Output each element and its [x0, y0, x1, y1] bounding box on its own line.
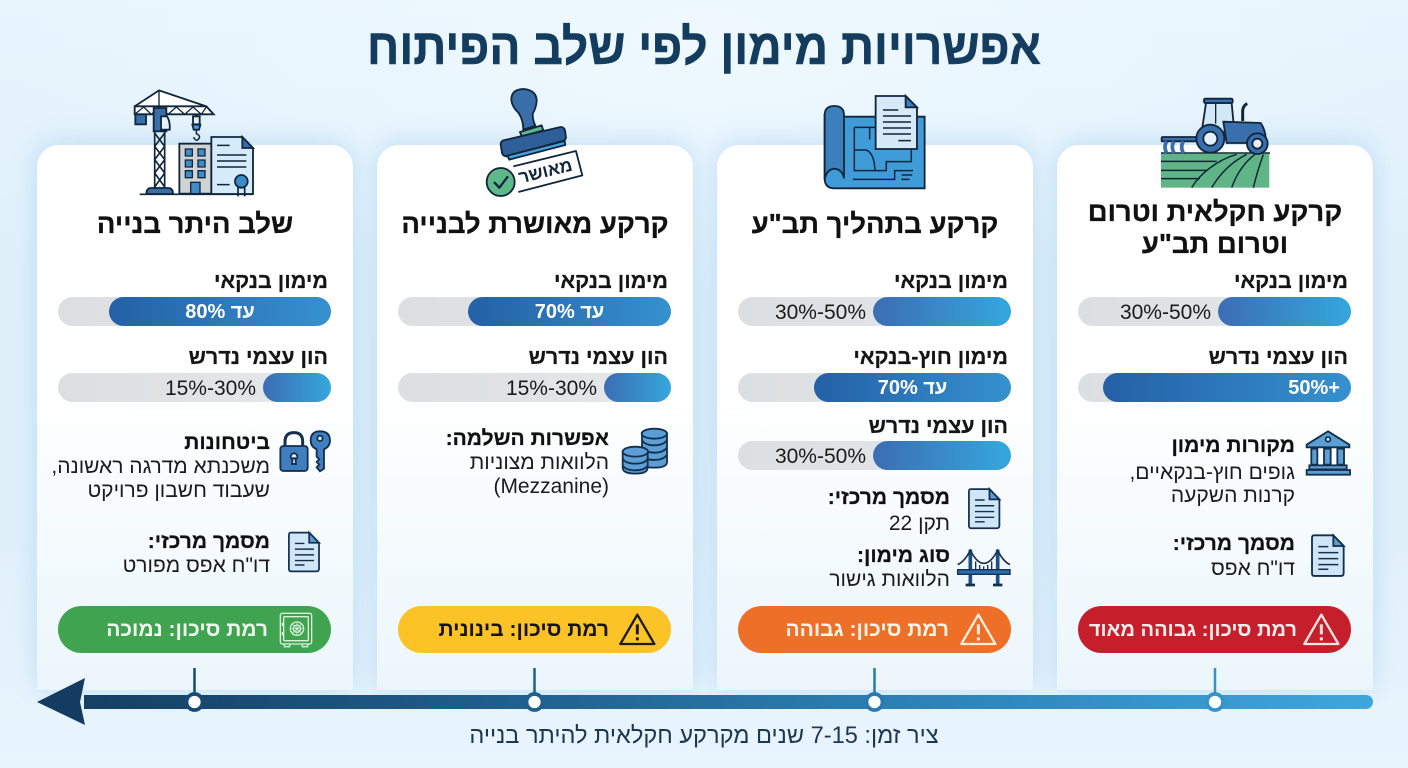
text: collateral: ביטחונות: [184, 431, 270, 454]
bar: bank financing: [1078, 297, 1351, 326]
text: non-bank bodies: גופים חוץ-בנקאיים,: [1129, 461, 1295, 484]
label: bank financing: מימון בנקאי: [214, 269, 328, 293]
text: risk level: רמת סיכון: גבוהה מאוד: [1089, 619, 1297, 641]
bar: bank financing: 30%-50%: [775, 301, 866, 324]
heading: שלב היתר בנייה: [97, 208, 293, 239]
icon: document: [1311, 533, 1346, 577]
text: risk level: רמת סיכון: נמוכה: [106, 618, 268, 641]
panel: agricultural land: [1057, 145, 1373, 690]
bar: bank financing: עד 80%: [185, 301, 255, 323]
text: project account lien: שעבוד חשבון פרויקט: [87, 479, 270, 502]
timeline node 2: [526, 668, 542, 710]
text: mezzanine: (Mezzanine): [493, 475, 609, 498]
text: zero report: דו"ח אפס: [1211, 557, 1295, 580]
icon: approval stamp: מאושר: [516, 154, 574, 187]
timeline node 1: [186, 668, 202, 710]
bar: bank financing: [738, 297, 1011, 326]
text: bridge loans: הלוואות גישור: [829, 568, 950, 591]
title: אפשרויות מימון לפי שלב הפיתוח: [367, 19, 1041, 75]
text: investment funds: קרנות השקעה: [1171, 484, 1295, 507]
timeline arrow: [37, 668, 1373, 725]
timeline node 4: [1207, 668, 1223, 710]
icon: warning: [1303, 614, 1340, 646]
icon: document: [968, 487, 1002, 530]
text: key document: מסמך מרכזי:: [148, 530, 270, 553]
bar: equity: 30%-50%: [775, 445, 866, 468]
icon: document: [288, 530, 321, 572]
bar: equity: [1078, 373, 1351, 402]
text: key document: מסמך מרכזי:: [1173, 532, 1295, 555]
text: financing type: סוג מימון:: [857, 544, 950, 567]
heading: קרקע בתהליך תב"ע: [752, 208, 998, 239]
icon: warning: [960, 614, 997, 646]
icon: crane, building and permit: [134, 89, 256, 196]
bar: equity: 50%+: [1288, 377, 1340, 399]
bar: equity: 15%-30%: [165, 377, 256, 400]
text: risk level: רמת סיכון: בינונית: [438, 618, 609, 641]
label: equity: הון עצמי נדרש: [189, 345, 328, 369]
icon: approval stamp: [486, 88, 584, 197]
icon: warning: [619, 614, 656, 646]
risk pill: high: [738, 606, 1011, 653]
panel: land in zoning process: [717, 145, 1033, 690]
icon: bridge: [957, 548, 1011, 586]
text: amendment 22: תקן 22: [889, 512, 950, 535]
label: bank financing: מימון בנקאי: [1234, 269, 1348, 293]
bar: non-bank financing: עד 70%: [878, 377, 947, 399]
timeline node 3: [866, 668, 882, 710]
label: bank financing: מימון בנקאי: [554, 269, 668, 293]
bar: bank financing: [398, 297, 671, 326]
label: equity: הון עצמי נדרש: [869, 414, 1008, 438]
panel: building permit stage: [37, 145, 353, 690]
label: bank financing: מימון בנקאי: [894, 269, 1008, 293]
text: first-degree mortgage: משכנתא מדרגה ראשונה,: [51, 455, 270, 478]
label: equity: הון עצמי נדרש: [1209, 345, 1348, 369]
risk pill: very high: [1078, 606, 1351, 653]
icon: blueprint and document: [824, 94, 926, 190]
text: funding sources: מקורות מימון: [1171, 434, 1295, 457]
icon: tractor on field: [1160, 98, 1270, 188]
text: mezzanine loans: הלוואות מצוניות: [470, 451, 609, 474]
text: supplementary option: אפשרות השלמה:: [446, 427, 609, 450]
risk pill: medium: [398, 606, 671, 653]
bar: bank financing: עד 70%: [535, 301, 604, 323]
bar: equity: [58, 373, 331, 402]
heading line two: וטרום תב"ע: [1142, 228, 1288, 259]
bar: equity: 15%-30%: [506, 377, 597, 400]
bar: equity: [738, 441, 1011, 470]
bar: equity: [398, 373, 671, 402]
bar: bank financing: [58, 297, 331, 326]
bar: bank financing: 30%-50%: [1120, 301, 1211, 324]
bar: non-bank financing: [738, 373, 1011, 402]
panel: approved land: [377, 145, 693, 690]
icon: coin stacks: [622, 428, 668, 474]
icon: lock and key: [279, 430, 331, 472]
text: risk level: רמת סיכון: גבוהה: [785, 618, 949, 641]
heading: קרקע מאושרת לבנייה: [401, 208, 669, 239]
text: detailed zero report: דו"ח אפס מפורט: [123, 554, 270, 577]
heading: קרקע חקלאית וטרום: [1088, 196, 1342, 227]
icon: bank: [1306, 430, 1351, 476]
timeline caption: ציר זמן: 7-15 שנים מקרקע חקלאית להיתר בנייה: [469, 723, 939, 749]
arrowhead: [37, 678, 85, 725]
icon: safe: [280, 612, 312, 648]
risk pill: low: [58, 606, 331, 653]
label: equity: הון עצמי נדרש: [529, 345, 668, 369]
label: non-bank financing: מימון חוץ-בנקאי: [853, 345, 1008, 369]
text: key document: מסמך מרכזי:: [828, 486, 950, 509]
